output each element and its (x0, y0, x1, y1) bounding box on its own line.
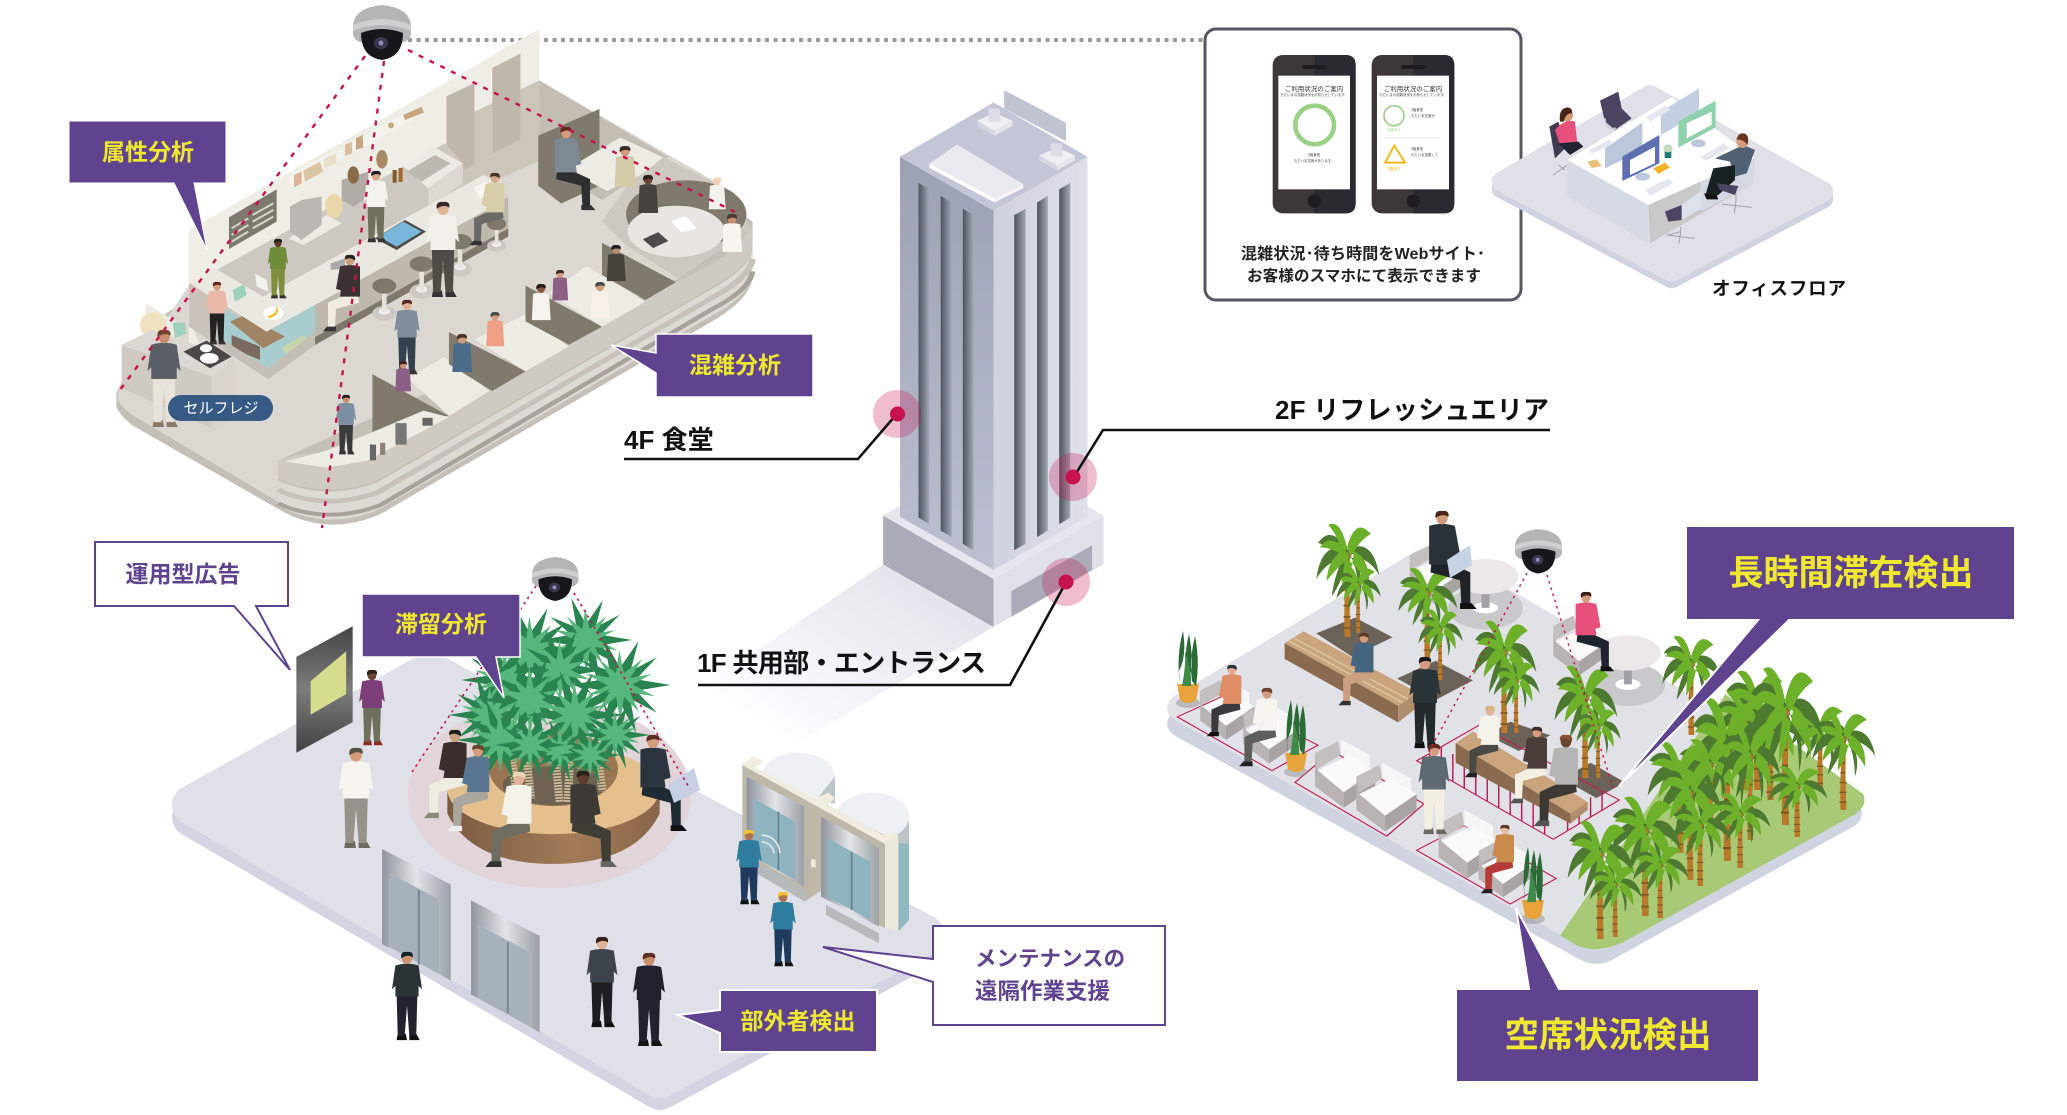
revolving entrance doors (742, 753, 909, 943)
office platform (1502, 95, 1823, 278)
callout: dwell analysis (362, 594, 520, 698)
callout: remote maintenance: メンテナンスの (975, 947, 1125, 971)
green planting zone (1560, 694, 1865, 949)
panel: 1F lobby (192, 586, 925, 1090)
caption: お客様のスマホにて表示できます (1247, 266, 1481, 285)
desk (1549, 88, 1755, 243)
callout: long stay detection (1619, 526, 2015, 786)
callout: remote maintenance (823, 926, 1165, 1025)
office people (1555, 107, 1755, 199)
camera sight lines (410, 586, 690, 789)
caption: 混雑状況･待ち時間をWebサイト･ (1241, 245, 1485, 263)
caption (1241, 245, 1485, 285)
callout: dwell analysis: 滞留分析 (395, 611, 487, 637)
building shadow (707, 565, 994, 741)
camera sight lines (1427, 573, 1613, 788)
phone: two statuses: 混雑あり (1387, 166, 1401, 171)
self checkout counter (122, 303, 235, 433)
callout: crowd analysis (611, 334, 813, 397)
phone: single status: ご利用状況のご案内 (1285, 84, 1343, 93)
phone: single status (1273, 55, 1356, 213)
callout: long stay detection: 長時間滞在検出 (1728, 554, 1974, 593)
callout: digital ads (95, 542, 290, 670)
phone: single status: ただいま空席があります。 (1294, 158, 1334, 163)
phone: two statuses: 空席あり (1387, 127, 1401, 132)
icon: camera 1F (532, 557, 578, 601)
marker: 2F (1049, 430, 1550, 501)
callout: outsider detection (678, 990, 877, 1052)
lobby floor (192, 672, 925, 1090)
lobby people (339, 670, 796, 1046)
phone: two statuses: ただいま空席が (1411, 113, 1435, 118)
phone: two statuses: 2階食堂 (1411, 107, 1424, 112)
tower (900, 90, 1087, 570)
phone: single status: ただいまの混雑状況をお知らせしています。 (1280, 92, 1348, 97)
callout: vacancy detection: 空席状況検出 (1504, 1017, 1712, 1055)
kitchen and bar counter (189, 107, 508, 379)
round planter bench (408, 702, 691, 888)
callout: outsider detection: 部外者検出 (740, 1008, 856, 1034)
digital signage (296, 626, 353, 753)
label: 4F cafeteria: 4F 食堂 (624, 425, 714, 455)
label: office floor: オフィスフロア (1712, 278, 1846, 299)
panel: building (707, 90, 1104, 741)
marker: 4F (624, 390, 921, 459)
panel: 2F refresh area (1176, 511, 1875, 949)
self checkout pill (168, 395, 273, 421)
elevators (382, 849, 540, 1033)
lounge furniture (1177, 543, 1665, 904)
camera sight lines (120, 50, 735, 528)
lounge people (1207, 511, 1614, 893)
phone: two statuses: ただいま混雑して (1411, 152, 1438, 157)
callout: vacancy detection (1456, 908, 1759, 1082)
label: 2F refresh area: 2F リフレッシュエリア (1275, 395, 1549, 425)
callout: digital ads: 運用型広告 (126, 561, 240, 587)
phone: two statuses: ただいまの混雑状況をお知らせしています。 (1379, 92, 1447, 97)
palm grove (1568, 636, 1875, 939)
cafeteria platform (116, 29, 753, 525)
phone: two statuses: ご利用状況のご案内 (1384, 84, 1442, 93)
icon: camera 2F (1515, 529, 1562, 574)
lounge floor (1192, 565, 1837, 947)
phone: two statuses: 3階食堂 (1411, 146, 1424, 151)
icon: camera 4F (353, 5, 411, 60)
panel: smartphone info box (1205, 29, 1521, 300)
phone: single status: 2階食堂 (1308, 152, 1321, 157)
booth seating (286, 109, 750, 468)
cafeteria people (147, 127, 742, 454)
label: 1F entrance: 1F 共用部・エントランス (697, 648, 986, 678)
potted plants (1176, 631, 1545, 924)
callout: crowd analysis: 混雑分析 (689, 352, 781, 378)
box frame (1205, 29, 1521, 300)
panel: office floor (1502, 88, 1823, 278)
callout: attribute analysis (69, 121, 226, 250)
palm trees: seating area (1316, 524, 1621, 778)
self checkout pill: セルフレジ (183, 400, 259, 417)
base block (883, 506, 1104, 627)
marker: 1F (698, 558, 1090, 685)
callout: remote maintenance: 遠隔作業支援 (975, 979, 1111, 1004)
callout: attribute analysis: 属性分析 (102, 139, 194, 165)
planter palms (448, 598, 671, 784)
panel: 4F cafeteria floor (116, 29, 753, 528)
grey connection line (408, 38, 1205, 42)
phone: two statuses (1372, 55, 1454, 213)
